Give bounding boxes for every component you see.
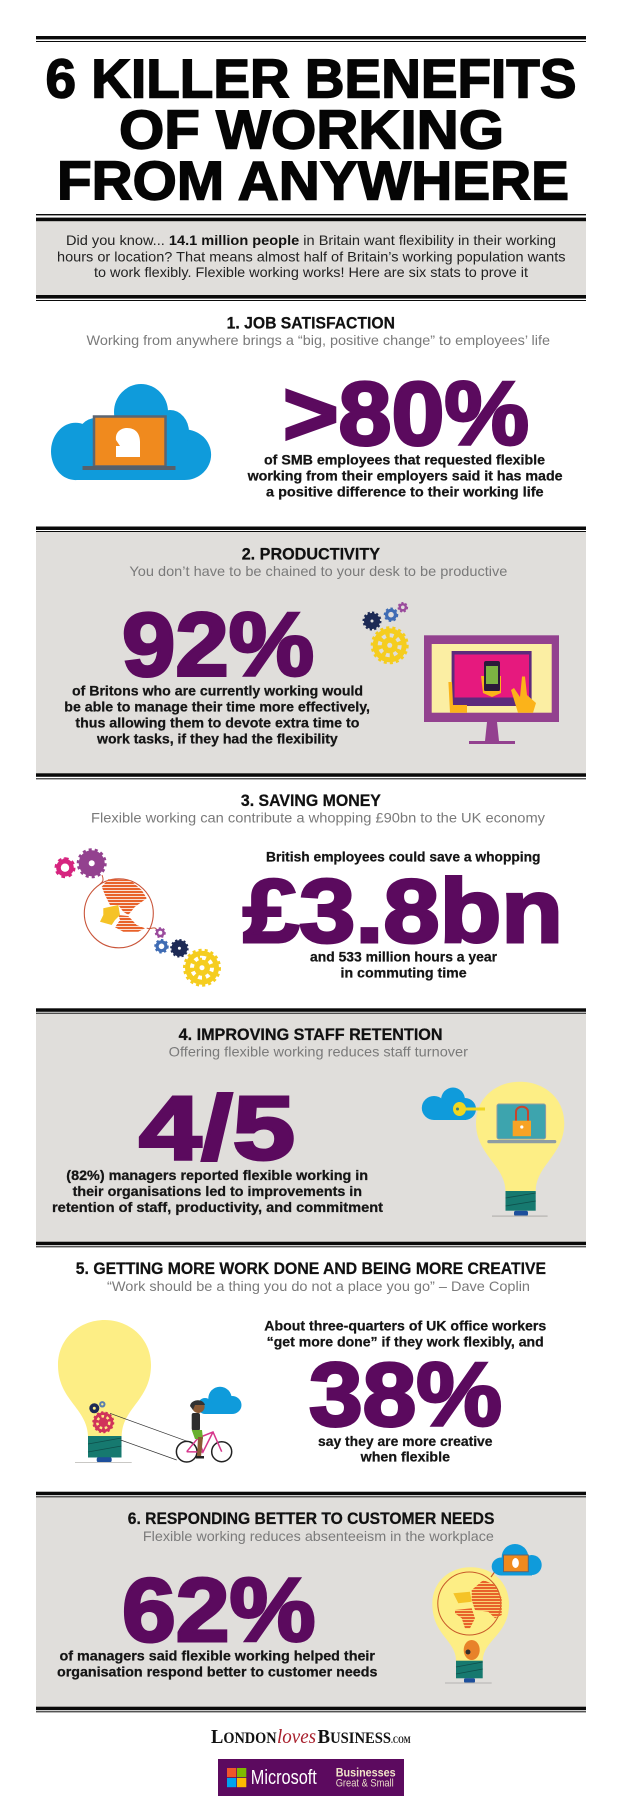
logo: Microsoft Businesses Great and Small: Businesses xyxy=(336,1768,396,1780)
logo: London Loves Business: BUSINESS xyxy=(318,1726,391,1748)
heading: 4. IMPROVING STAFF RETENTION xyxy=(179,1025,443,1044)
stat description xyxy=(318,1434,493,1465)
stat description: of Britons who are currently working would xyxy=(72,684,363,699)
subheading: Flexible working can contribute a whopping £90bn to the UK economy xyxy=(91,810,545,826)
stat description: a positive difference to their working life xyxy=(266,485,544,500)
stat description xyxy=(57,1649,377,1680)
intro text: hours or location? That means almost half of Britain’s working population wants xyxy=(57,248,566,264)
logo: Microsoft Businesses Great and Small: Microsoft xyxy=(251,1767,317,1789)
panel: 4 staff retention xyxy=(36,1008,586,1247)
intro text: to work flexibly. Flexible working works! Here are six stats to prove it xyxy=(94,264,528,280)
stat: greater than 80 percent: >80% xyxy=(283,364,529,464)
lead-in text: “get more done” if they work flexibly, and xyxy=(267,1335,544,1350)
heading: 2. PRODUCTIVITY xyxy=(242,544,381,564)
intro text xyxy=(57,232,566,280)
icon: gears xyxy=(364,603,407,662)
logo: London Loves Business: .COM xyxy=(391,1735,411,1745)
stat description: retention of staff, productivity, and commitment xyxy=(52,1200,384,1215)
panel: 5 more work done xyxy=(58,1259,546,1465)
stat description xyxy=(52,1168,384,1215)
icon: light bulb with laptop, lock, cloud and key xyxy=(422,1082,564,1217)
title xyxy=(46,48,576,212)
subheading: Working from anywhere brings a “big, positive change” to employees’ life xyxy=(86,332,550,348)
logo: London Loves Business xyxy=(211,1726,411,1748)
stat description: (82%) managers reported flexible working in xyxy=(66,1168,368,1183)
top double rule xyxy=(36,36,586,42)
lead-in text: About three-quarters of UK office workers xyxy=(264,1319,546,1334)
stat: 38 percent: 38% xyxy=(309,1346,502,1446)
stat description xyxy=(64,684,370,747)
panel: intro xyxy=(36,214,586,301)
title: OF WORKING xyxy=(119,98,504,160)
panel: 3 saving money xyxy=(56,791,563,985)
stat: 4 out of 5: 4/5 xyxy=(139,1079,295,1179)
lead-in text: British employees could save a whopping xyxy=(266,850,540,865)
panel: 1 job satisfaction xyxy=(51,314,563,500)
logo: Microsoft Businesses Great and Small: Great & Small xyxy=(336,1778,394,1790)
heading: 3. SAVING MONEY xyxy=(241,791,382,810)
subheading: “Work should be a thing you do not a place you go” – Dave Coplin xyxy=(107,1278,530,1294)
stat description: be able to manage their time more effectively, xyxy=(64,700,370,715)
panel: 2 productivity xyxy=(36,526,586,779)
stat description: organisation respond better to customer needs xyxy=(57,1665,377,1680)
subheading: Flexible working reduces absenteeism in the workplace xyxy=(143,1528,494,1544)
intro text: Did you know... 14.1 million people in Britain want flexibility in their working xyxy=(66,232,556,248)
title: 6 KILLER BENEFITS xyxy=(46,48,576,110)
stat description xyxy=(310,950,498,980)
heading: 5. GETTING MORE WORK DONE AND BEING MORE CREATIVE xyxy=(76,1259,546,1278)
stat description: of managers said flexible working helped their xyxy=(60,1649,376,1664)
icon: light bulb, gears and cyclist xyxy=(58,1320,242,1463)
subheading: You don’t have to be chained to your desk to be productive xyxy=(129,563,508,579)
stat description: in commuting time xyxy=(340,965,467,980)
subheading: Offering flexible working reduces staff turnover xyxy=(169,1044,468,1060)
stat description: thus allowing them to devote extra time to xyxy=(75,716,359,731)
stat: 62 percent: 62% xyxy=(122,1561,316,1661)
logo: Microsoft Businesses Great and Small xyxy=(218,1759,404,1796)
stat description: and 533 million hours a year xyxy=(310,950,498,965)
stat description: their organisations led to improvements in xyxy=(73,1184,362,1199)
lead-in text xyxy=(264,1319,546,1350)
stat description: say they are more creative xyxy=(318,1434,493,1449)
panel: 6 customer needs xyxy=(36,1492,586,1712)
stat: 92 percent: 92% xyxy=(122,596,314,696)
stat description: working from their employers said it has made xyxy=(247,469,563,484)
heading: 1. JOB SATISFACTION xyxy=(227,314,395,332)
icon: monitor with tablet and phone xyxy=(424,635,559,744)
icon: light bulb with globe, agent and cloud xyxy=(432,1544,542,1684)
logo: London Loves Business: loves xyxy=(277,1726,316,1748)
logo: London Loves Business: LONDON xyxy=(211,1726,277,1748)
icon: Microsoft squares xyxy=(227,1768,246,1787)
heading: 6. RESPONDING BETTER TO CUSTOMER NEEDS xyxy=(128,1509,494,1528)
icon: gears and globe xyxy=(56,850,219,985)
stat description xyxy=(247,452,563,500)
stat description: work tasks, if they had the flexibility xyxy=(96,732,338,747)
stat description: when flexible xyxy=(360,1450,451,1465)
title: FROM ANYWHERE xyxy=(57,150,569,212)
stat description: of SMB employees that requested flexible xyxy=(264,452,546,468)
stat: 3.8 billion pounds: £3.8bn xyxy=(243,862,563,962)
icon: cloud with laptop xyxy=(51,384,211,480)
